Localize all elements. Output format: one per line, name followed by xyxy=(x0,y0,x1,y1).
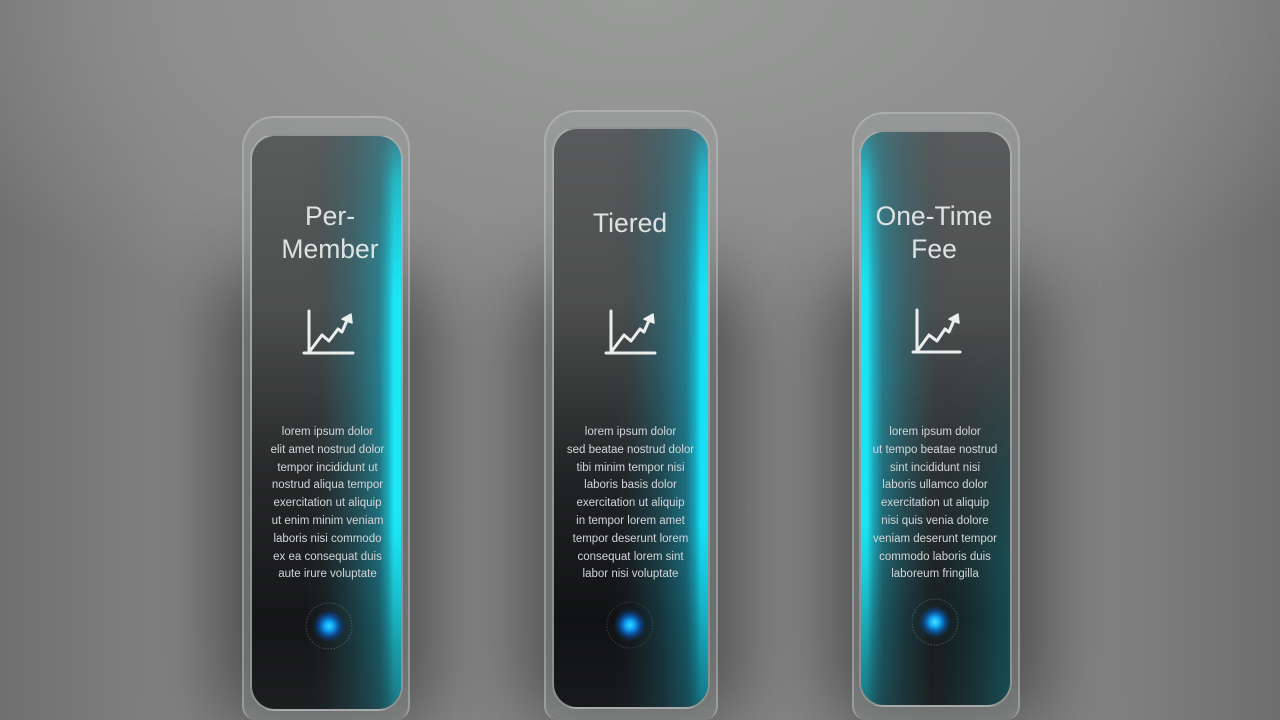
text block: tiered body: tibi minim tempor nisi xyxy=(576,462,684,474)
icon: line chart xyxy=(302,310,354,354)
text block: per-member body: exercitation ut aliquip xyxy=(273,497,382,509)
text block: one-time fee body: laboris ullamco dolor xyxy=(882,479,988,491)
text block: per-member body: lorem ipsum dolor xyxy=(282,426,373,438)
heading: per-member xyxy=(281,201,379,264)
text block: per-member body: nostrud aliqua tempor xyxy=(272,479,383,491)
text block: per-member body: laboris nisi commodo xyxy=(273,533,382,545)
panel: per-member xyxy=(182,116,469,720)
text block: tiered body: laboris basis dolor xyxy=(584,479,677,491)
text block: per-member body: ex ea consequat duis xyxy=(273,551,382,563)
text block: one-time fee body xyxy=(873,426,997,580)
icon: line chart xyxy=(912,308,962,354)
indicator: blue dot xyxy=(606,602,654,648)
text block: per-member body xyxy=(271,426,384,580)
text block: per-member body: aute irure voluptate xyxy=(278,568,377,580)
heading: one-time fee: Fee xyxy=(911,234,957,264)
text block: tiered body: sed beatae nostrud dolor xyxy=(567,444,694,456)
text block: one-time fee body: nisi quis venia dolore xyxy=(881,515,989,527)
text block: tiered body: tempor deserunt lorem xyxy=(573,533,688,545)
text block: per-member body: elit amet nostrud dolor xyxy=(271,444,384,456)
heading: per-member: Member xyxy=(281,234,379,264)
indicator: blue dot xyxy=(912,598,958,646)
card: one-time fee xyxy=(859,130,1012,707)
text block: one-time fee body: veniam deserunt tempor xyxy=(873,533,997,545)
text block: per-member body: ut enim minim veniam xyxy=(272,515,383,527)
panel: tiered xyxy=(486,110,779,720)
text block: one-time fee body: sint incididunt nisi xyxy=(890,462,980,474)
text block: tiered body: labor nisi voluptate xyxy=(583,568,678,580)
heading: tiered: Tiered xyxy=(593,208,667,238)
heading: one-time fee: One-Time xyxy=(876,201,992,231)
text block: one-time fee body: laboreum fringilla xyxy=(891,568,979,580)
card: tiered xyxy=(552,127,710,709)
card: per-member xyxy=(250,134,403,711)
text block: tiered body: lorem ipsum dolor xyxy=(585,426,676,438)
text block: tiered body: consequat lorem sint xyxy=(577,551,684,563)
text block: one-time fee body: exercitation ut aliquip xyxy=(881,497,989,509)
icon: line chart xyxy=(604,310,656,354)
text block: tiered body: in tempor lorem amet xyxy=(576,515,685,527)
panel: one-time fee xyxy=(794,112,1080,720)
text block: one-time fee body: ut tempo beatae nostrud xyxy=(873,444,997,456)
text block: tiered body: exercitation ut aliquip xyxy=(576,497,685,509)
text block: one-time fee body: lorem ipsum dolor xyxy=(889,426,981,438)
heading: one-time fee xyxy=(876,201,992,264)
heading: per-member: Per- xyxy=(305,201,355,231)
text block: one-time fee body: commodo laboris duis xyxy=(879,551,991,563)
indicator: blue dot xyxy=(306,602,352,650)
text block: per-member body: tempor incididunt ut xyxy=(277,462,378,474)
text block: tiered body xyxy=(567,426,694,580)
